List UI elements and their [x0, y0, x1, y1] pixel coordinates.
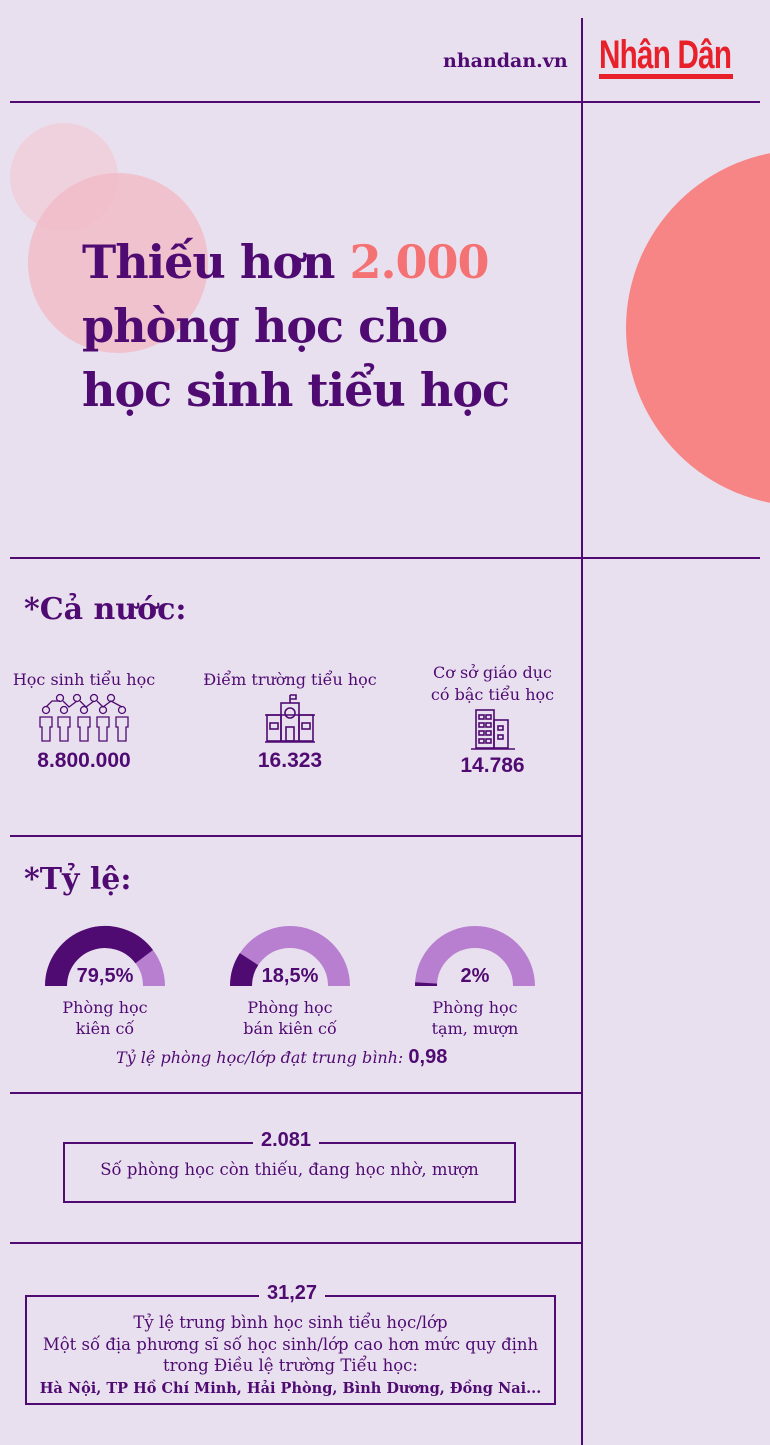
callout: 2.081: Số phòng học còn thiếu, đang học nhờ, mượn — [100, 1160, 479, 1179]
gauge: bán kiên cố: bán kiên cố — [243, 1019, 337, 1038]
gauge: kiên cố — [45, 926, 165, 1038]
heading: Cả nước: *Cả nước: — [24, 592, 186, 627]
stat: school sites: 16.323 — [258, 749, 322, 772]
gauge: kiên cố: kiên cố — [76, 1019, 134, 1038]
title: Thiếu hơn 2.000 — [82, 235, 489, 289]
gauge: kiên cố: Phòng học — [62, 998, 148, 1017]
stat: students: 8.800.000 — [37, 749, 131, 772]
header site name: nhandan.vn — [443, 50, 568, 72]
callout: 31,27 — [25, 1295, 556, 1405]
callout: 2.081 — [63, 1142, 516, 1203]
title: phòng học cho — [82, 299, 447, 353]
decorative circles — [10, 123, 118, 231]
icon: people — [39, 694, 129, 742]
gauge: tạm mượn: 2% — [461, 965, 489, 987]
icon: school — [265, 694, 315, 743]
gauge: bán kiên cố — [230, 926, 350, 1038]
gauge: bán kiên cố: Phòng học — [247, 998, 333, 1017]
callout: 31,27: Tỷ lệ trung bình học sinh tiểu học/lớp — [133, 1313, 448, 1332]
stat: school sites: Điểm trường tiểu học — [203, 670, 377, 689]
icon: building — [471, 709, 515, 750]
gauge: tạm mượn: tạm, mượn — [432, 1019, 518, 1038]
grid lines — [581, 18, 583, 1445]
text: 2.081 — [261, 1129, 311, 1151]
callout: 31,27: trong Điều lệ trường Tiểu học: — [163, 1356, 418, 1375]
callout: 31,27: Hà Nội, TP Hồ Chí Minh, Hải Phòng, Bình Dương, Đồng Nai... — [40, 1380, 541, 1396]
stat: institutions: 14.786 — [460, 754, 525, 777]
stat: institutions — [431, 663, 554, 777]
gauge: tạm mượn — [415, 926, 535, 1038]
logo: Nhân Dân — [599, 33, 731, 77]
gauge: bán kiên cố: 18,5% — [262, 965, 318, 987]
stat: institutions: Cơ sở giáo dục — [433, 663, 552, 682]
stat: students: Học sinh tiểu học — [13, 670, 155, 689]
text: 31,27 — [267, 1282, 317, 1304]
heading: Tỷ lệ: *Tỷ lệ: — [24, 862, 131, 897]
gauge: tạm mượn: Phòng học — [432, 998, 518, 1017]
title: học sinh tiểu học — [82, 363, 509, 417]
stat: students — [13, 670, 155, 772]
title — [82, 235, 509, 417]
gauge: kiên cố: 79,5% — [77, 965, 133, 987]
ratio text: Tỷ lệ phòng học/lớp đạt trung bình: 0,98 — [116, 1046, 447, 1068]
stat: school sites — [203, 670, 377, 772]
callout: 31,27: Một số địa phương sĩ số học sinh/lớp cao hơn mức quy định — [43, 1334, 538, 1354]
stat: institutions: có bậc tiểu học — [431, 685, 554, 704]
